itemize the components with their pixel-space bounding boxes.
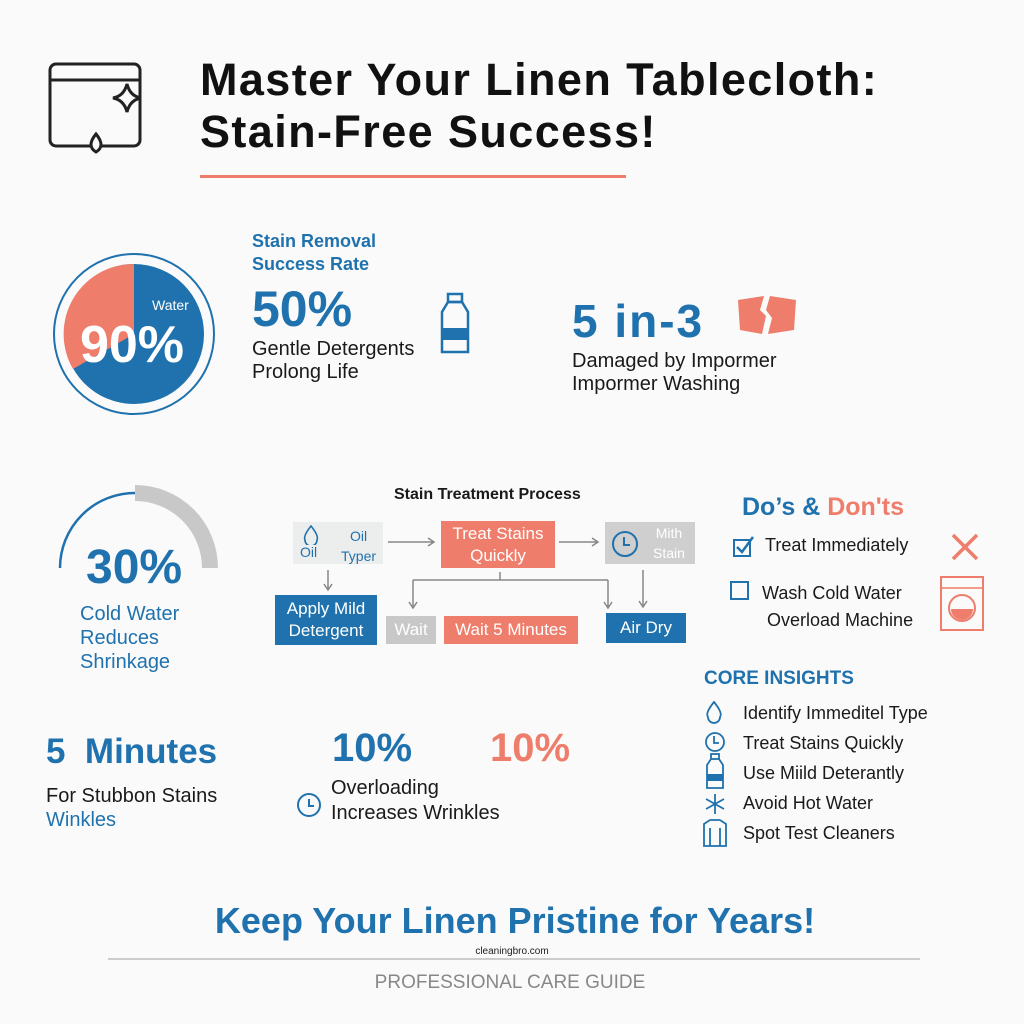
stat: success rate: 50% <box>252 281 352 337</box>
flowchart: stain treatment: Apply Mild <box>287 599 365 618</box>
panel: core insights: Spot Test Cleaners <box>743 823 895 843</box>
title: Master Your Linen Tablecloth: <box>200 54 878 105</box>
title <box>200 54 878 157</box>
panel: dos and donts <box>730 493 984 631</box>
chart: donut 90%: Water <box>152 297 189 313</box>
stat: 5 minutes <box>46 732 217 831</box>
stat: 5 in 3 <box>572 295 777 395</box>
flowchart: stain treatment: Oil <box>350 528 367 544</box>
panel: core insights: Identify Immeditel Type <box>743 703 928 723</box>
chart: donut 90%: 90% <box>80 316 184 374</box>
stat: 5 in 3: Impormer Washing <box>572 373 740 395</box>
flowchart: stain treatment: Stain <box>653 545 685 561</box>
stat: 5 in 3: 5 in-3 <box>572 295 704 347</box>
stat: 30%: Reduces <box>80 627 159 649</box>
stat: success rate: Success Rate <box>252 254 369 274</box>
title: Stain-Free Success! <box>200 106 657 157</box>
icon: torn cloth <box>738 296 796 334</box>
panel: dos and donts: Treat Immediately <box>765 535 908 555</box>
panel: core insights: Avoid Hot Water <box>743 793 873 813</box>
panel: dos and donts: Do’s & Don'ts <box>742 493 904 521</box>
stat: 30%: Cold Water <box>80 603 179 625</box>
stat: 5 minutes: 5 Minutes <box>46 732 217 771</box>
footer headline: Keep Your Linen Pristine for Years! <box>215 900 815 941</box>
icon: bottle <box>440 292 470 354</box>
panel: core insights: Treat Stains Quickly <box>743 733 903 753</box>
stat: 30% <box>80 541 182 673</box>
text: Overloading <box>331 777 439 799</box>
flowchart: stain treatment: Detergent <box>289 621 363 640</box>
flowchart: stain treatment: Treat Stains <box>452 524 544 542</box>
text: 10% <box>490 726 570 770</box>
stat: 5 minutes: Winkles <box>46 809 116 831</box>
flowchart: stain treatment: Mith <box>656 525 682 541</box>
flowchart: stain treatment: Wait <box>394 620 428 639</box>
stat: success rate: Stain Removal <box>252 231 376 251</box>
flowchart: stain treatment: Typer <box>341 548 376 564</box>
stat: 30%: Shrinkage <box>80 651 170 673</box>
text: cleaningbro.com <box>475 946 549 957</box>
footer subtitle: PROFESSIONAL CARE GUIDE <box>375 972 645 993</box>
chart: gauge 30% <box>58 485 218 568</box>
flowchart: stain treatment: Wait 5 Minutes <box>455 620 567 639</box>
icon: tablecloth <box>48 62 142 154</box>
stat: 5 in 3: Damaged by Impormer <box>572 350 777 372</box>
stat: 10% overloading <box>297 726 570 824</box>
panel: dos and donts: Overload Machine <box>767 610 913 630</box>
text: Increases Wrinkles <box>331 802 500 824</box>
flowchart: stain treatment: Air Dry <box>620 618 672 637</box>
panel: core insights: CORE INSIGHTS <box>704 668 854 689</box>
stat: 5 minutes: For Stubbon Stains <box>46 785 217 807</box>
flowchart: stain treatment <box>275 486 695 645</box>
chart: donut 90% <box>53 253 215 415</box>
stat: success rate <box>252 231 414 383</box>
panel: dos and donts: Wash Cold Water <box>762 583 902 603</box>
panel: core insights: Use Miild Deterantly <box>743 763 904 783</box>
stat: 30%: 30% <box>86 541 182 594</box>
flowchart: stain treatment: Stain Treatment Process <box>394 486 581 503</box>
stat: success rate: Prolong Life <box>252 361 359 383</box>
stat: success rate: Gentle Detergents <box>252 338 414 360</box>
text: 10% <box>332 726 412 770</box>
panel: core insights <box>703 668 928 847</box>
flowchart: stain treatment: Quickly <box>470 546 526 564</box>
flowchart: stain treatment: Oil <box>300 544 317 560</box>
